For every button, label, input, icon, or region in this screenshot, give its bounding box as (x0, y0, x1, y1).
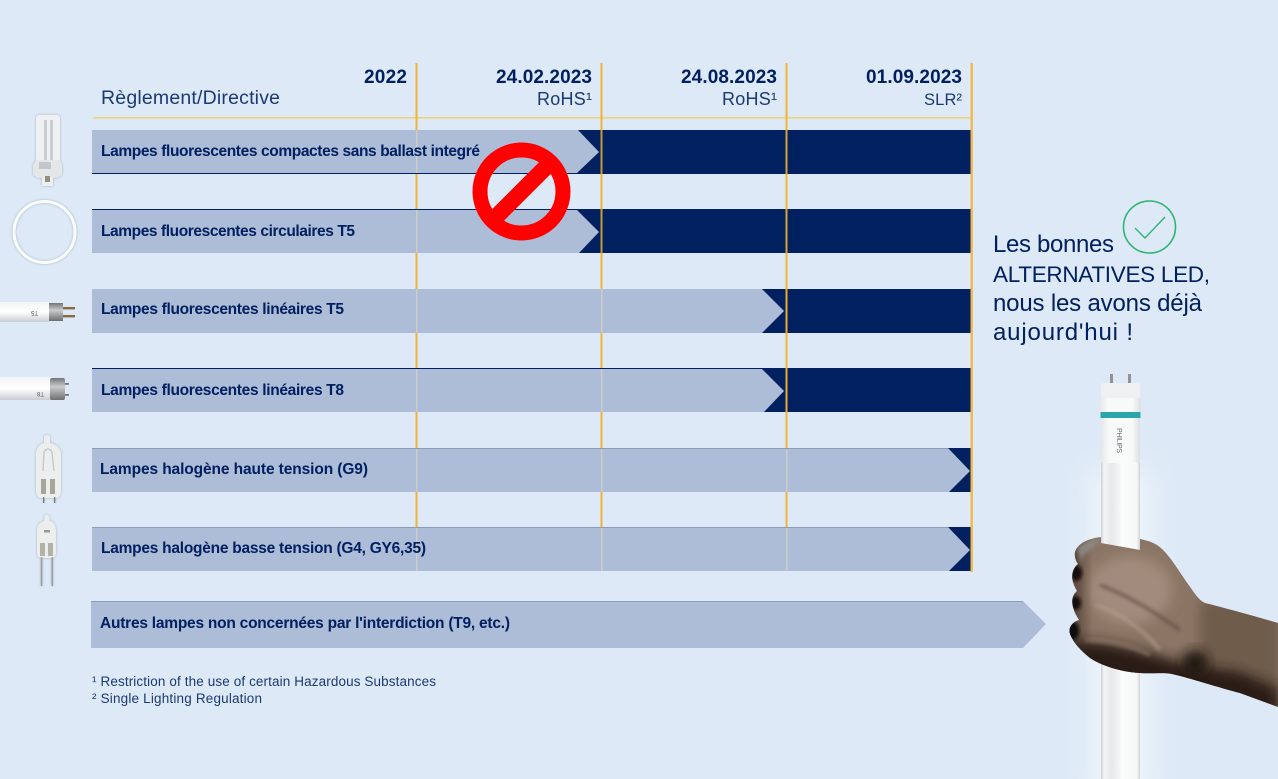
footnotes (92, 674, 436, 706)
LED tube branded section (1101, 410, 1140, 463)
bar: low voltage halogen lamps (92, 527, 971, 571)
heading: regulation column: Règlement/Directive (101, 87, 280, 109)
heading: date 2022: 2022 (364, 67, 407, 88)
bar: circular T5 lamps: Lampes fluorescentes circulaires T5 (101, 223, 355, 240)
callout: LED alternatives text: aujourd'hui ! (993, 319, 1133, 346)
icon: circular fluorescent lamp (14, 202, 75, 262)
heading: date 24.02.2023 RoHS (496, 67, 592, 109)
bar: compact fluorescent lamps (92, 130, 971, 174)
callout: LED alternatives text: ALTERNATIVES LED, (993, 262, 1210, 287)
bar: other unaffected lamps (91, 601, 1046, 648)
bar: linear T8 lamps (92, 368, 971, 412)
footnotes: ² Single Lighting Regulation (92, 691, 262, 706)
icon: prohibition sign (480, 150, 563, 233)
icon: linear T5 lamp: T5 (30, 309, 38, 315)
callout: LED alternatives text (993, 231, 1210, 346)
hand gripping tube (1070, 537, 1278, 707)
heading: date 24.08.2023 RoHS: 24.08.2023 (681, 67, 777, 88)
timeline grid lines (93, 63, 972, 571)
teal band (1100, 412, 1140, 418)
Philips brand text: PHILIPS (1115, 428, 1122, 453)
icon: linear T8 lamp (0, 377, 69, 400)
bar: other unaffected lamps: Autres lampes non concernées par l'interdiction (T9, etc.) (100, 615, 510, 632)
tube end cap (1100, 374, 1141, 412)
bar: compact fluorescent lamps: Lampes fluorescentes compactes sans ballast integré (101, 143, 480, 160)
bar: linear T8 lamps: Lampes fluorescentes linéaires T8 (101, 382, 344, 399)
bar: linear T5 lamps (92, 289, 971, 333)
heading: date 24.02.2023 RoHS: RoHS¹ (537, 89, 592, 109)
heading: date 01.09.2023 SLR: SLR² (924, 91, 962, 109)
glow behind LED tube (1092, 470, 1150, 779)
heading: date 01.09.2023 SLR (866, 67, 962, 109)
bar: circular T5 lamps (92, 209, 971, 253)
bar: linear T5 lamps: Lampes fluorescentes linéaires T5 (101, 301, 344, 318)
callout: LED alternatives text: nous les avons déjà (993, 290, 1203, 317)
icon: compact fluorescent lamp (33, 115, 62, 186)
heading: date 01.09.2023 SLR: 01.09.2023 (866, 67, 962, 88)
icon: G4 halogen lamp (37, 515, 56, 586)
LED tube lower section (1101, 463, 1140, 779)
heading: date 24.08.2023 RoHS: RoHS¹ (722, 89, 777, 109)
bar: G9 halogen lamps (92, 448, 971, 492)
icon: green check mark (1124, 201, 1176, 253)
icon: LED tube held in hand (1060, 374, 1278, 779)
footnotes: ¹ Restriction of the use of certain Hazardous Substances (92, 674, 436, 689)
end line of timeline (970, 63, 973, 572)
LED tube upper section (1101, 463, 1140, 550)
bar: low voltage halogen lamps: Lampes halogène basse tension (G4, GY6,35) (101, 540, 426, 557)
icon: linear T5 lamp (0, 302, 75, 322)
callout: LED alternatives text: Les bonnes (993, 231, 1114, 258)
icon: linear T8 lamp: T8 (36, 390, 44, 396)
icon: G9 halogen lamp (36, 435, 61, 503)
bar: G9 halogen lamps: Lampes halogène haute tension (G9) (100, 461, 368, 478)
heading: date 24.08.2023 RoHS (681, 67, 777, 109)
heading: date 24.02.2023 RoHS: 24.02.2023 (496, 67, 592, 88)
